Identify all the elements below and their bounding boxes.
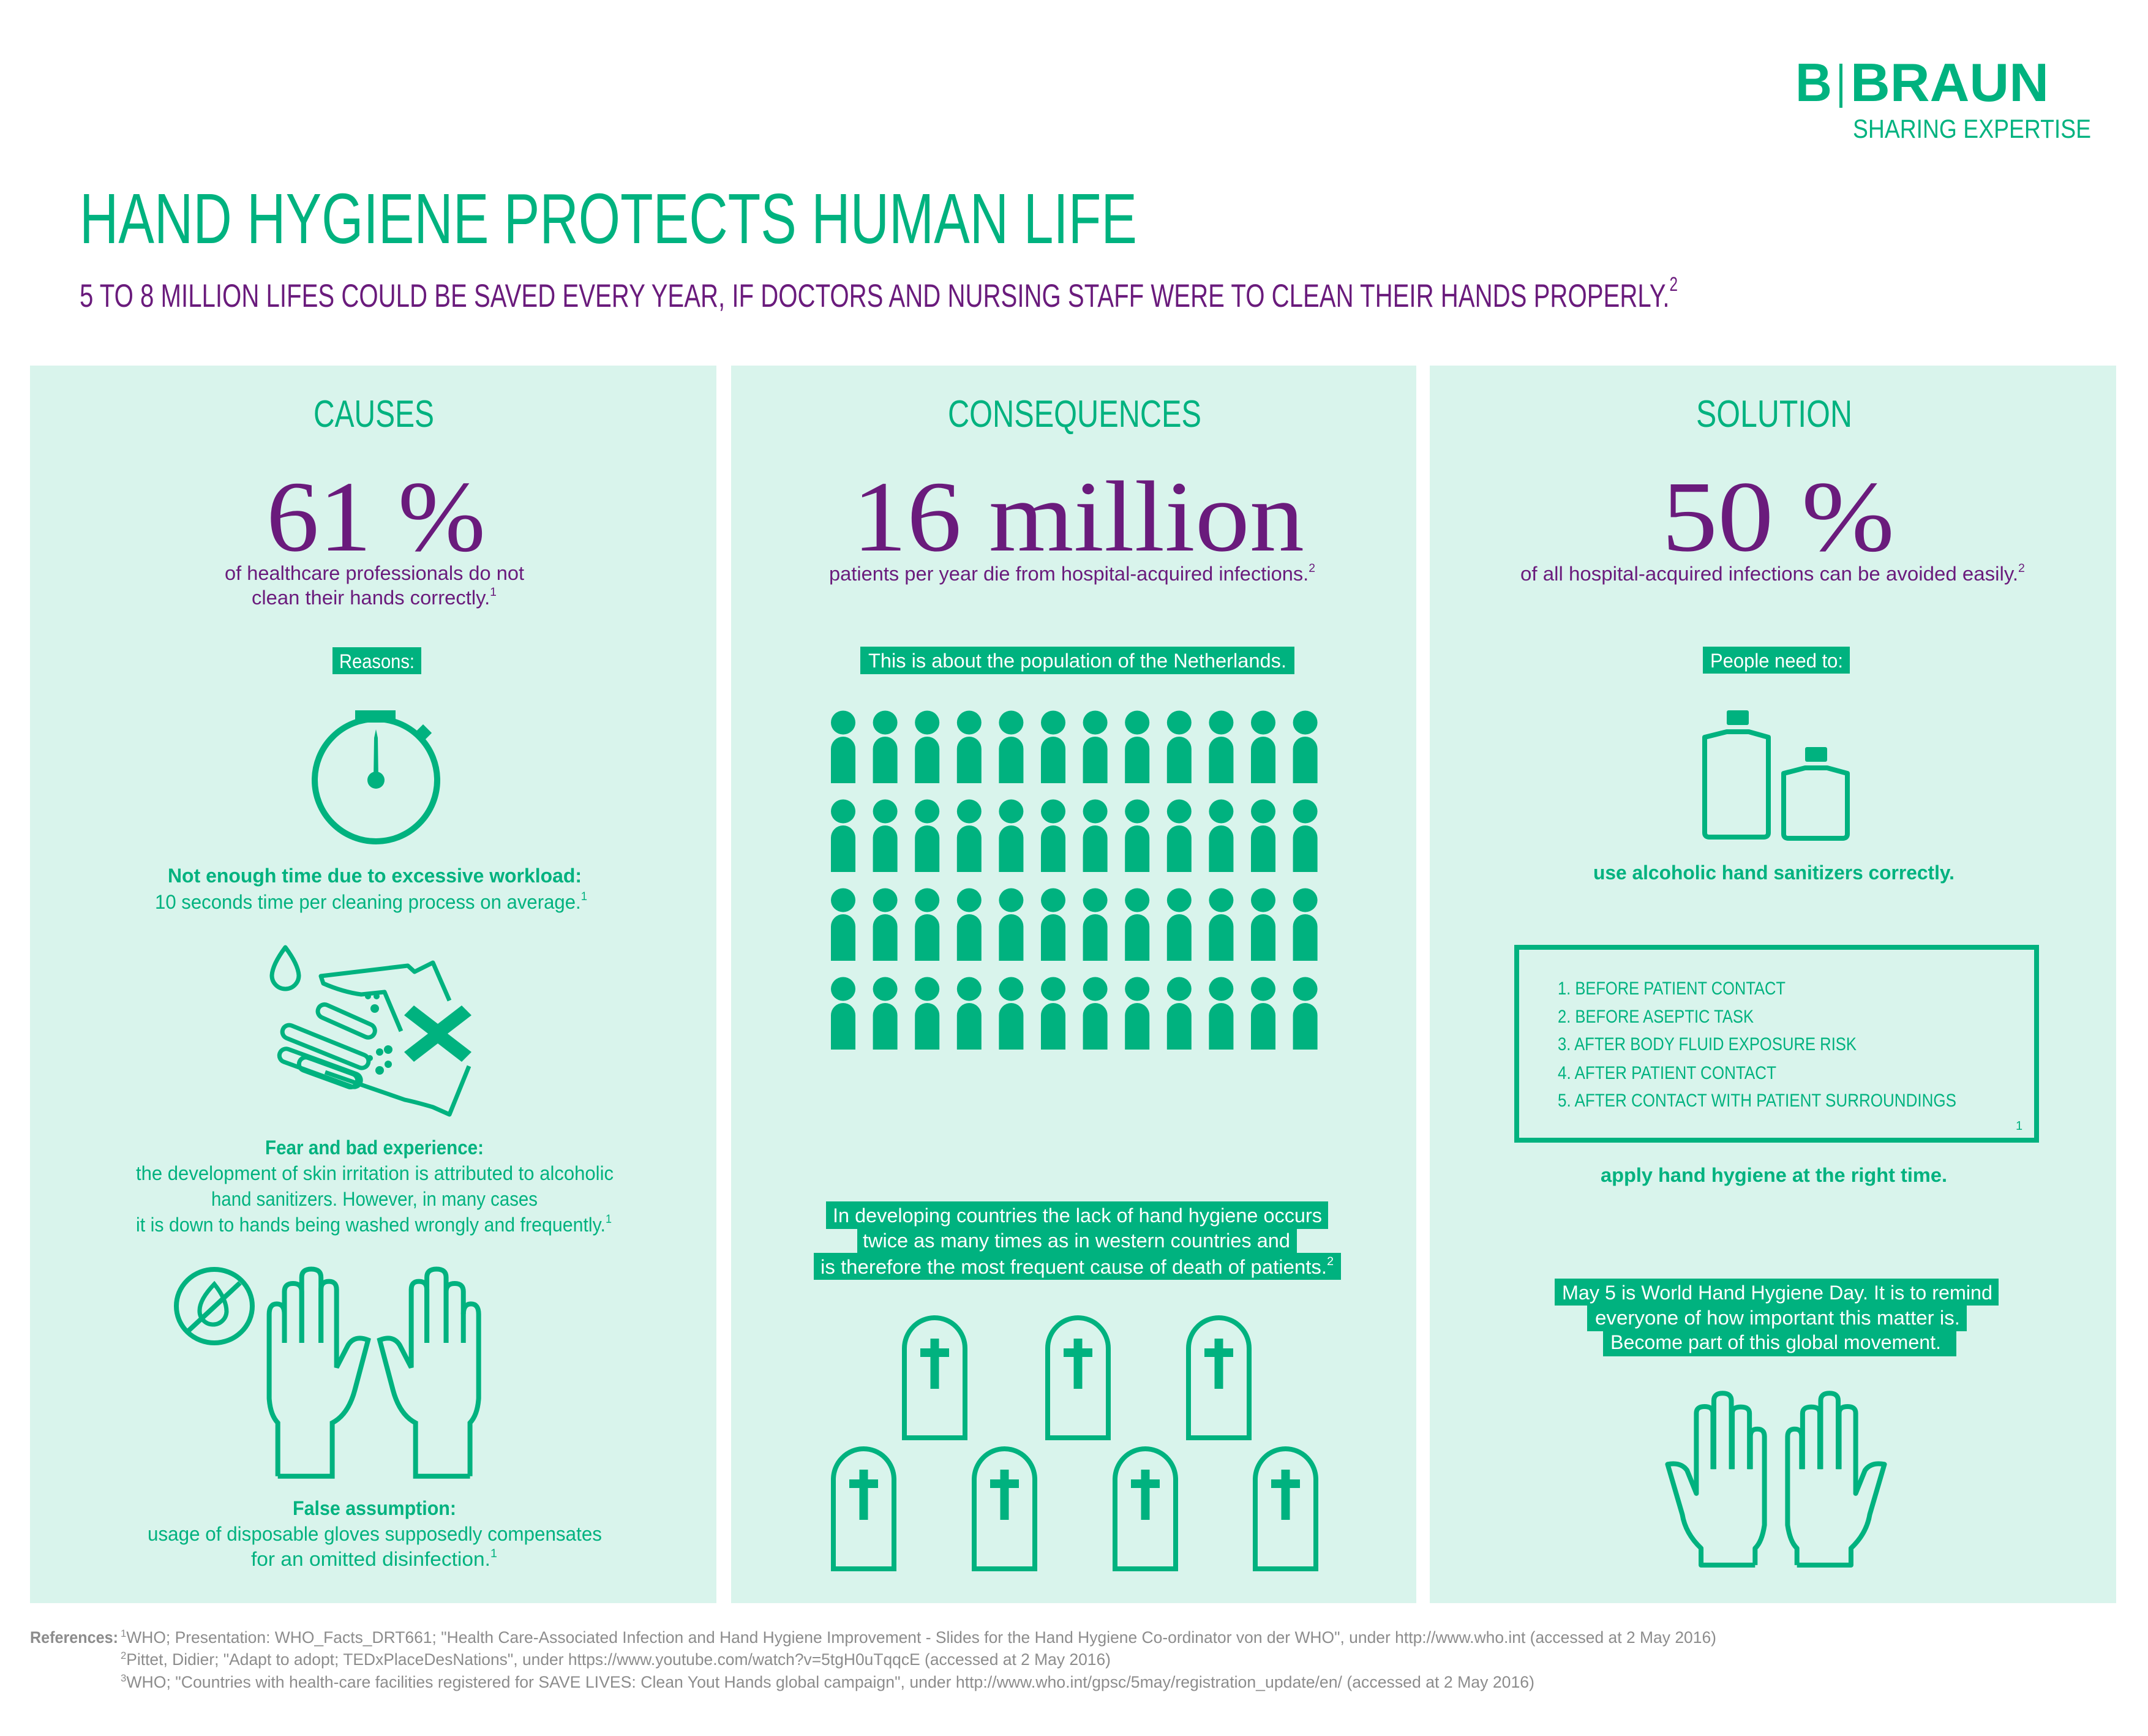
references: 1 bbox=[121, 1628, 126, 1639]
text: not enough time: 1 bbox=[581, 890, 587, 903]
text: false assumption: for an omitted disinfection. bbox=[251, 1548, 480, 1570]
text: fear and bad experience: the development of skin irritation is attributed to alcoholic bbox=[136, 1162, 614, 1184]
callout: world hand hygiene day bbox=[1555, 1279, 1999, 1356]
panel: causes bbox=[30, 366, 716, 1603]
title: HAND HYGIENE PROTECTS HUMAN LIFE bbox=[80, 179, 1137, 258]
references: Pittet, Didier; "Adapt to adopt; TEDxPlaceDesNations", under https://www.youtube.com/watch?v=5tgH0uTqqcE (accessed at 2 May 2016) bbox=[126, 1650, 1111, 1669]
panel: consequences bbox=[731, 366, 1416, 1603]
icon: stopwatch bbox=[315, 710, 437, 841]
label: reasons: Reasons: bbox=[339, 650, 415, 672]
icon: washing hands with cross bbox=[272, 947, 471, 1114]
references: References: bbox=[30, 1628, 118, 1647]
references: 3 bbox=[121, 1672, 126, 1684]
big number 50%: 50 % bbox=[1662, 460, 1895, 573]
callout: developing countries: twice as many times as in western countries and bbox=[863, 1230, 1290, 1252]
stat text: clean their hands correctly. bbox=[252, 587, 484, 609]
icon: sanitizer bottles bbox=[1705, 710, 1847, 838]
stat text: 1 bbox=[490, 586, 497, 599]
box: five moments list: 1. BEFORE PATIENT CONTACT bbox=[1558, 979, 1786, 999]
callout: developing countries bbox=[814, 1201, 1341, 1280]
box: five moments list: 1 bbox=[2016, 1119, 2022, 1133]
text: fear and bad experience bbox=[136, 1137, 614, 1236]
big number 16 million: 16 million bbox=[852, 460, 1304, 573]
stat text: 2 bbox=[1309, 562, 1315, 575]
references: 2 bbox=[121, 1650, 126, 1661]
icon: gravestones bbox=[833, 1318, 1316, 1569]
callout: world hand hygiene day: everyone of how important this matter is. bbox=[1595, 1307, 1960, 1329]
text: use sanitizers: use alcoholic hand sanitizers correctly. bbox=[1593, 862, 1955, 884]
subtitle: 2 bbox=[1670, 273, 1678, 295]
stat text bbox=[225, 562, 524, 609]
heading: solution: SOLUTION bbox=[1696, 393, 1852, 435]
text: false assumption: False assumption: bbox=[293, 1497, 456, 1519]
references bbox=[30, 1628, 1716, 1691]
stat text: patients per year die from hospital-acquired infections. bbox=[829, 563, 1299, 585]
stat text: 2 bbox=[2018, 562, 2025, 575]
box: five moments list: 4. AFTER PATIENT CONTACT bbox=[1558, 1063, 1776, 1083]
logo bbox=[1795, 52, 2091, 144]
icon: gloves bbox=[269, 1269, 479, 1476]
icon: clean hands bbox=[1667, 1393, 1885, 1565]
text: fear and bad experience: Fear and bad experience: bbox=[265, 1137, 484, 1159]
callout: developing countries: In developing countries the lack of hand hygiene occurs bbox=[833, 1204, 1322, 1227]
text: false assumption: 1 bbox=[490, 1547, 497, 1560]
callout: developing countries: 2 bbox=[1327, 1255, 1334, 1268]
box: five moments list: 2. BEFORE ASEPTIC TASK bbox=[1558, 1007, 1754, 1027]
people grid bbox=[831, 710, 1318, 1050]
text: not enough time: 10 seconds time per cleaning process on average. bbox=[155, 891, 593, 913]
references: WHO; Presentation: WHO_Facts_DRT661; "Health Care-Associated Infection and Hand Hygiene Improvement - Slides for the Hand Hygiene Co-ordinator von der WHO", under http://www.who.int (accessed at 2 May 2016) bbox=[126, 1628, 1716, 1647]
box: five moments list bbox=[1517, 947, 2037, 1140]
text: fear and bad experience: hand sanitizers. However, in many cases bbox=[211, 1188, 538, 1210]
label: people need to: People need to: bbox=[1710, 650, 1843, 672]
heading: consequences: CONSEQUENCES bbox=[948, 393, 1201, 435]
heading: causes: CAUSES bbox=[314, 393, 434, 435]
text: false assumption: usage of disposable gloves supposedly compensates bbox=[148, 1523, 602, 1545]
text: apply hand hygiene: apply hand hygiene at the right time. bbox=[1601, 1164, 1947, 1186]
subtitle: 5 TO 8 MILLION LIFES COULD BE SAVED EVERY YEAR, IF DOCTORS AND NURSING STAFF WERE TO CLEAN THEIR HANDS PROPERLY. bbox=[80, 278, 2148, 314]
big number 61%: 61 % bbox=[266, 460, 486, 573]
callout: developing countries: is therefore the most frequent cause of death of patients. bbox=[821, 1256, 1312, 1278]
callout: world hand hygiene day: Become part of this global movement. bbox=[1610, 1331, 1941, 1353]
box: five moments list: 5. AFTER CONTACT WITH PATIENT SURROUNDINGS bbox=[1558, 1091, 1956, 1111]
panel: solution bbox=[1430, 366, 2116, 1603]
logo: SHARING EXPERTISE bbox=[1853, 115, 2091, 144]
stat text: of healthcare professionals do not bbox=[225, 562, 524, 584]
box: five moments list: 3. AFTER BODY FLUID EXPOSURE RISK bbox=[1558, 1034, 1857, 1054]
label: netherlands: This is about the population of the Netherlands. bbox=[868, 650, 1286, 672]
text: fear and bad experience: it is down to hands being washed wrongly and frequently. bbox=[136, 1214, 631, 1236]
icon: no water bbox=[176, 1269, 252, 1343]
text: false assumption bbox=[148, 1497, 602, 1570]
stat text: of all hospital-acquired infections can be avoided easily. bbox=[1520, 563, 2002, 585]
text: not enough time bbox=[155, 865, 587, 913]
text: not enough time: Not enough time due to excessive workload: bbox=[168, 865, 582, 887]
references: WHO; "Countries with health-care facilities registered for SAVE LIVES: Clean Yout Hands global campaign", under http://www.who.int/gpsc/5may/registration_update/en/ (accessed at 2 May 2016) bbox=[126, 1673, 1534, 1691]
text: fear and bad experience: 1 bbox=[606, 1213, 612, 1226]
logo: B bbox=[1795, 52, 1832, 113]
logo: BRAUN bbox=[1850, 52, 2049, 113]
callout: world hand hygiene day: May 5 is World Hand Hygiene Day. It is to remind bbox=[1562, 1282, 1992, 1304]
